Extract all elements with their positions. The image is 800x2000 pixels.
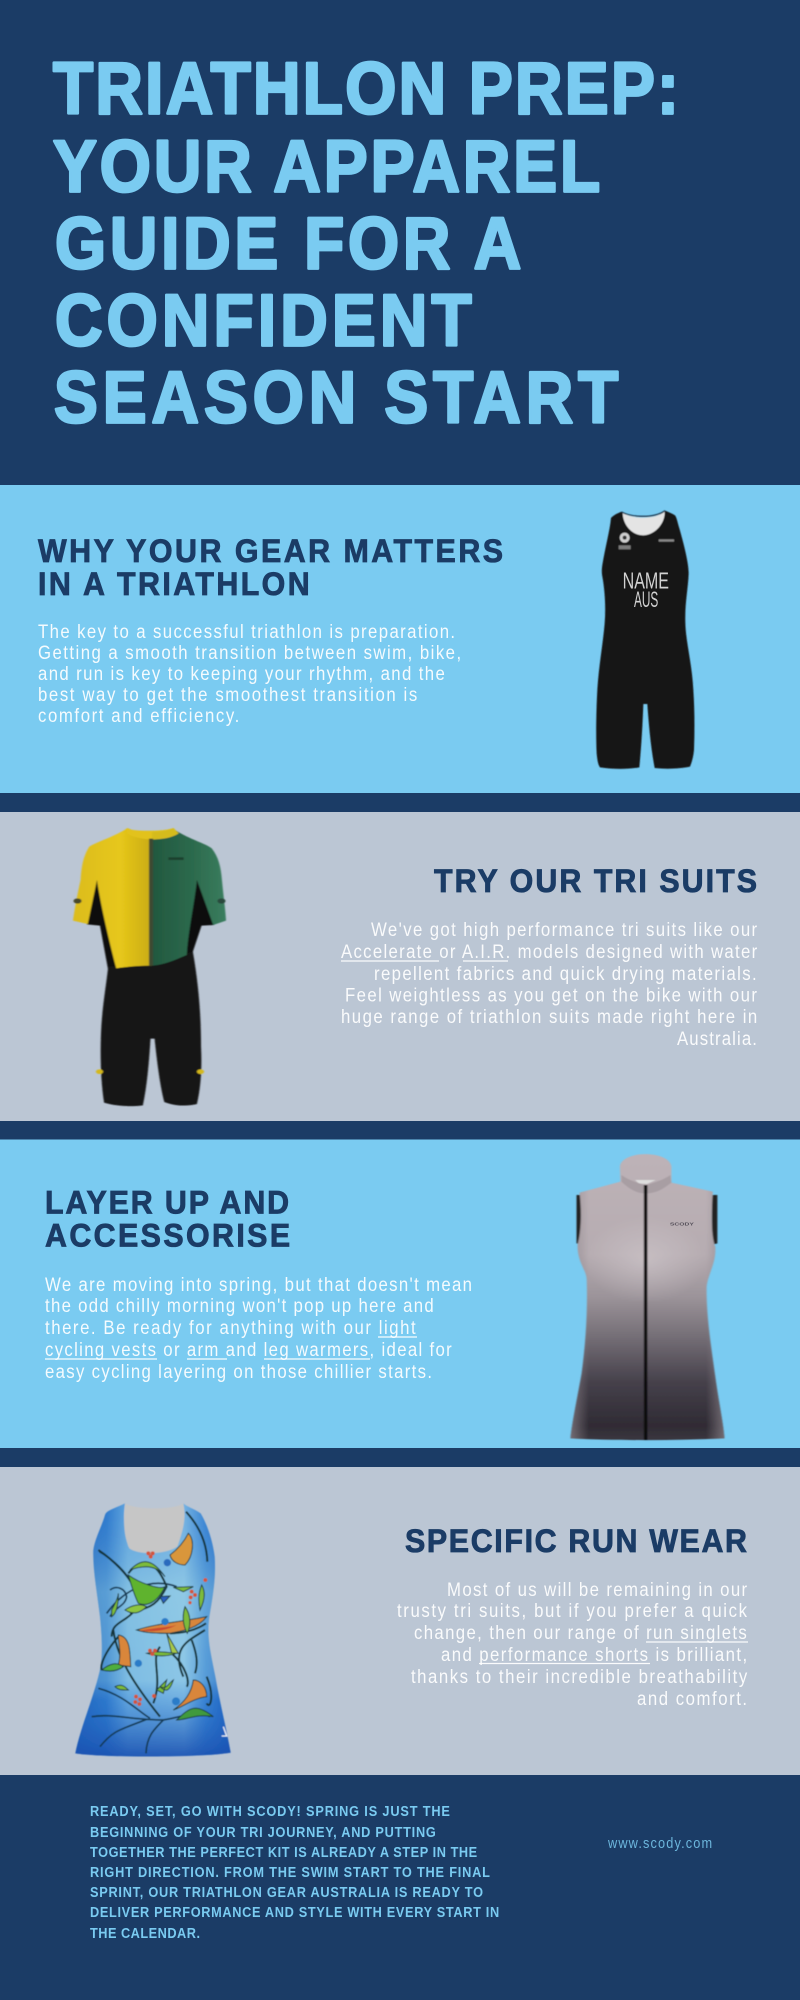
text block: specific run wear: and comfort. [637,1688,747,1709]
text block: footer message: RIGHT DIRECTION. FROM THE SWIM START TO THE FINAL [90,1864,490,1880]
text block: footer message: TOGETHER THE PERFECT KIT IS ALREADY A STEP IN THE [90,1844,477,1860]
image: black tri suit: AUS [634,587,658,612]
text block: specific run wear [397,1579,748,1709]
text block: try our tri suits [341,919,757,1049]
text block: try our tri suits: Australia. [677,1028,757,1049]
text block: layer up and accessorise: the odd chilly morning won't pop up here and [45,1295,434,1316]
image: cycling vest: SCODY [670,1222,694,1227]
text block: specific run wear: thanks to their incredible breathability [411,1666,748,1687]
title [53,47,679,438]
panel: try our tri suits [0,812,800,1121]
text block: specific run wear: and performance shorts is brilliant, [441,1644,747,1665]
title: SEASON START [54,356,618,438]
text block: try our tri suits: repellent fabrics and quick drying materials. [374,963,757,984]
text block: layer up and accessorise [45,1274,472,1382]
title: CONFIDENT [55,279,472,361]
image: black tri suit: NAME [623,567,669,593]
text block: layer up and accessorise: cycling vests or arm and leg warmers, ideal for [45,1339,452,1360]
title: YOUR APPAREL [53,125,600,207]
website link: www.scody.com [607,1834,712,1851]
text block: specific run wear: trusty tri suits, but if you prefer a quick [397,1600,748,1621]
text block: why your gear matters: best way to get the smoothest transition is [38,684,417,705]
heading: layer up and accessorise: ACCESSORISE [45,1218,290,1254]
text block: why your gear matters [38,621,461,726]
text block: footer message: SPRINT, OUR TRIATHLON GEAR AUSTRALIA IS READY TO [90,1884,483,1900]
text block: why your gear matters: The key to a successful triathlon is preparation. [38,621,455,642]
image: yellow and green tri suit [73,828,226,1106]
heading: why your gear matters: WHY YOUR GEAR MATTERS [38,533,503,569]
text block: try our tri suits: Accelerate or A.I.R. models designed with water [341,941,757,962]
text block: layer up and accessorise: We are moving into spring, but that doesn't mean [45,1274,472,1295]
panel: layer up and accessorise [0,1140,800,1448]
heading: why your gear matters: IN A TRIATHLON [38,566,310,602]
text block: try our tri suits: We've got high performance tri suits like our [371,919,757,940]
title: GUIDE FOR A [55,202,521,284]
text block: footer message: READY, SET, GO WITH SCODY! SPRING IS JUST THE [90,1803,450,1819]
heading: layer up and accessorise [45,1185,290,1254]
text block: footer message [90,1803,499,1941]
text block: try our tri suits: Feel weightless as you get on the bike with our [345,984,757,1006]
heading: specific run wear: SPECIFIC RUN WEAR [405,1523,747,1559]
panel: specific run wear [0,1467,800,1775]
text block: layer up and accessorise: easy cycling layering on those chillier starts. [45,1361,432,1382]
image: rainbow lorikeet run singlet [75,1503,231,1756]
text block: footer message: DELIVER PERFORMANCE AND STYLE WITH EVERY START IN [90,1904,499,1920]
text block: why your gear matters: comfort and efficiency. [38,705,239,726]
text block: footer message: BEGINNING OF YOUR TRI JOURNEY, AND PUTTING [90,1824,436,1840]
text block: specific run wear: change, then our range of run singlets [414,1622,747,1643]
title: TRIATHLON PREP: [53,47,679,129]
text block: try our tri suits: huge range of triathlon suits made right here in [341,1006,757,1027]
heading: try our tri suits: TRY OUR TRI SUITS [434,863,757,899]
text block: layer up and accessorise: there. Be ready for anything with our light [45,1317,416,1338]
heading: why your gear matters [38,533,503,602]
text block: why your gear matters: and run is key to keeping your rhythm, and the [38,663,445,684]
heading: layer up and accessorise: LAYER UP AND [45,1185,289,1221]
image: cycling vest [570,1154,724,1440]
panel: footer call to action [90,1803,712,1941]
text block: specific run wear: Most of us will be remaining in our [447,1579,747,1600]
text block: footer message: THE CALENDAR. [90,1925,200,1941]
text block: why your gear matters: Getting a smooth transition between swim, bike, [38,642,461,663]
image: black tri suit [596,511,694,769]
panel: why your gear matters [0,485,800,793]
